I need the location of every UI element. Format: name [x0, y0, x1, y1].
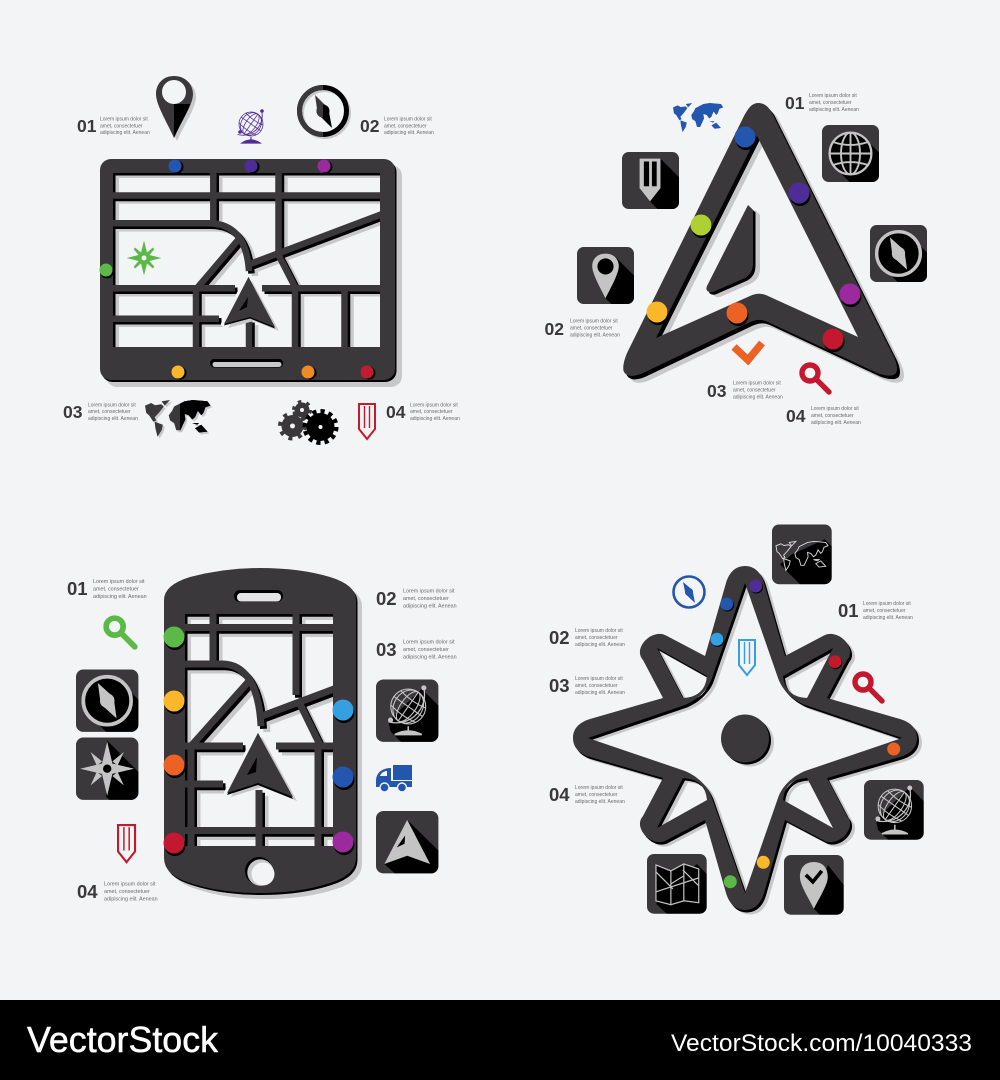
- label 03: 03: [707, 381, 727, 401]
- label 04: 04: [549, 784, 570, 805]
- marker dots: [164, 626, 354, 856]
- label 03: Lorem ipsum dolor sit: [88, 402, 136, 408]
- label 01: amet, consectetuer: [93, 586, 139, 592]
- icon: blue truck: [376, 765, 412, 792]
- navigation arrow: [227, 733, 297, 801]
- marker dots: [100, 160, 376, 380]
- label 02: adipiscing elit. Aenean: [403, 604, 457, 610]
- label 04: Lorem ipsum dolor sit: [811, 406, 859, 412]
- label 03: adipiscing elit. Aenean: [88, 416, 138, 422]
- label 04: Lorem ipsum dolor sit: [575, 785, 623, 791]
- icon: globe square: [864, 780, 924, 840]
- marker dots: [646, 126, 862, 352]
- icon: gears: [280, 402, 336, 442]
- label 01: [67, 578, 147, 600]
- icon: standing globe square: [376, 680, 438, 742]
- label 04: adipiscing elit. Aenean: [811, 420, 861, 426]
- label 02: [549, 627, 625, 648]
- footer brand: VectorStock: [27, 1019, 219, 1060]
- label 02: [376, 588, 457, 610]
- label 02: Lorem ipsum dolor sit: [570, 319, 618, 325]
- label 02: [544, 319, 620, 339]
- label 04: 04: [786, 406, 806, 426]
- icon: compass square: [870, 225, 927, 282]
- label 03: 03: [63, 402, 83, 422]
- navigation arrow: [224, 277, 279, 331]
- label 02: 02: [360, 116, 380, 136]
- label 04: [786, 406, 861, 426]
- label 02: amet, consectetuer: [570, 326, 613, 332]
- label 04: [77, 881, 158, 902]
- label 02: adipiscing elit. Aenean: [384, 130, 434, 136]
- label 03: [707, 381, 783, 401]
- icon: red pencil: [118, 825, 135, 862]
- label 03: amet, consectetuer: [403, 647, 449, 653]
- icon: orange check: [734, 343, 762, 360]
- label 01: amet, consectetuer: [809, 100, 852, 106]
- label 01: 01: [77, 116, 97, 136]
- label 01: adipiscing elit. Aenean: [100, 130, 150, 136]
- label 04: amet, consectetuer: [410, 409, 453, 415]
- icon: world map square: [772, 524, 832, 584]
- label 03: 03: [376, 639, 397, 660]
- compass star center: [721, 714, 774, 766]
- icon: red magnifier: [802, 365, 829, 392]
- icon: location pin: [156, 76, 196, 141]
- smartphone map device: [164, 568, 362, 899]
- label 02: 02: [376, 588, 397, 609]
- label 04: Lorem ipsum dolor sit: [410, 402, 458, 408]
- label 01: 01: [785, 93, 805, 113]
- label 02: 02: [544, 319, 564, 339]
- label 04: amet, consectetuer: [811, 413, 854, 419]
- label 01: Lorem ipsum dolor sit: [100, 117, 148, 123]
- label 03: adipiscing elit. Aenean: [733, 395, 783, 401]
- label 01: [785, 93, 859, 113]
- label 02: [360, 116, 434, 136]
- icon: folded map square: [647, 854, 707, 914]
- label 03: amet, consectetuer: [88, 409, 131, 415]
- label 01: Lorem ipsum dolor sit: [809, 93, 857, 99]
- label 04: 04: [386, 402, 406, 422]
- icon: red pencil: [359, 404, 375, 439]
- panel: arrow navigation: [544, 93, 927, 426]
- label 04: adipiscing elit. Aenean: [104, 896, 158, 902]
- label 02: Lorem ipsum dolor sit: [575, 628, 623, 634]
- icon: green magnifier: [106, 618, 135, 647]
- label 04: amet, consectetuer: [575, 792, 618, 798]
- icon: red magnifier: [855, 674, 882, 701]
- footer image url: VectorStock.com/10040333: [671, 1030, 972, 1057]
- label 03: [376, 639, 457, 660]
- label 02: Lorem ipsum dolor sit: [384, 117, 432, 123]
- arrow inner piece: [706, 205, 760, 297]
- label 03: adipiscing elit. Aenean: [403, 654, 457, 660]
- arrow outline band: [623, 103, 904, 383]
- label 03: amet, consectetuer: [575, 683, 618, 689]
- label 01: adipiscing elit. Aenean: [863, 615, 913, 621]
- icon: compass square: [76, 670, 138, 732]
- label 02: amet, consectetuer: [403, 596, 449, 602]
- label 04: Lorem ipsum dolor sit: [104, 882, 156, 888]
- label 01: [838, 600, 913, 621]
- label 03: [63, 402, 138, 422]
- icon: checked pin square: [784, 855, 844, 915]
- label 02: amet, consectetuer: [384, 123, 427, 129]
- marker dots: [710, 580, 900, 888]
- tablet map device: [92, 152, 416, 387]
- label 01: adipiscing elit. Aenean: [93, 594, 147, 600]
- label 04: [549, 784, 625, 805]
- icon: world map: [145, 400, 212, 439]
- label 03: [549, 675, 625, 696]
- label 01: Lorem ipsum dolor sit: [93, 579, 145, 585]
- icon: green compass rose: [126, 240, 162, 276]
- label 03: adipiscing elit. Aenean: [575, 690, 625, 696]
- icon: arrow square: [376, 811, 438, 873]
- label 03: amet, consectetuer: [733, 388, 776, 394]
- panel: compass star navigation: [549, 524, 924, 915]
- compass star band: [573, 566, 922, 914]
- label 04: [386, 402, 460, 422]
- label 04: adipiscing elit. Aenean: [575, 799, 625, 805]
- label 02: 02: [549, 627, 570, 648]
- label 01: amet, consectetuer: [863, 608, 906, 614]
- label 03: 03: [549, 675, 570, 696]
- icon: pencil square: [622, 152, 679, 209]
- icon: blue compass: [674, 576, 704, 608]
- label 01: amet, consectetuer: [100, 123, 143, 129]
- label 03: Lorem ipsum dolor sit: [575, 676, 623, 682]
- label 03: Lorem ipsum dolor sit: [403, 640, 455, 646]
- label 01: Lorem ipsum dolor sit: [863, 601, 911, 607]
- label 04: adipiscing elit. Aenean: [410, 416, 460, 422]
- panel: smartphone navigation: [67, 568, 457, 902]
- label 02: amet, consectetuer: [575, 635, 618, 641]
- icon: blue world map: [673, 103, 723, 132]
- footer bar: [0, 1000, 1000, 1080]
- label 02: adipiscing elit. Aenean: [570, 333, 620, 339]
- icon: compass ring: [300, 88, 348, 136]
- icon: purple globe: [234, 107, 268, 143]
- icon: compass rose square: [76, 738, 138, 800]
- label 02: Lorem ipsum dolor sit: [403, 588, 455, 594]
- label 04: 04: [77, 881, 98, 902]
- icon: globe square: [822, 125, 879, 182]
- label 01: adipiscing elit. Aenean: [809, 107, 859, 113]
- icon: light blue pencil: [739, 640, 755, 675]
- label 01: [77, 116, 150, 136]
- label 03: Lorem ipsum dolor sit: [733, 381, 781, 387]
- panel: tablet navigation: [63, 76, 460, 442]
- label 01: 01: [67, 578, 88, 599]
- label 02: adipiscing elit. Aenean: [575, 642, 625, 648]
- icon: pin square: [577, 247, 634, 304]
- label 01: 01: [838, 600, 859, 621]
- label 04: amet, consectetuer: [104, 889, 150, 895]
